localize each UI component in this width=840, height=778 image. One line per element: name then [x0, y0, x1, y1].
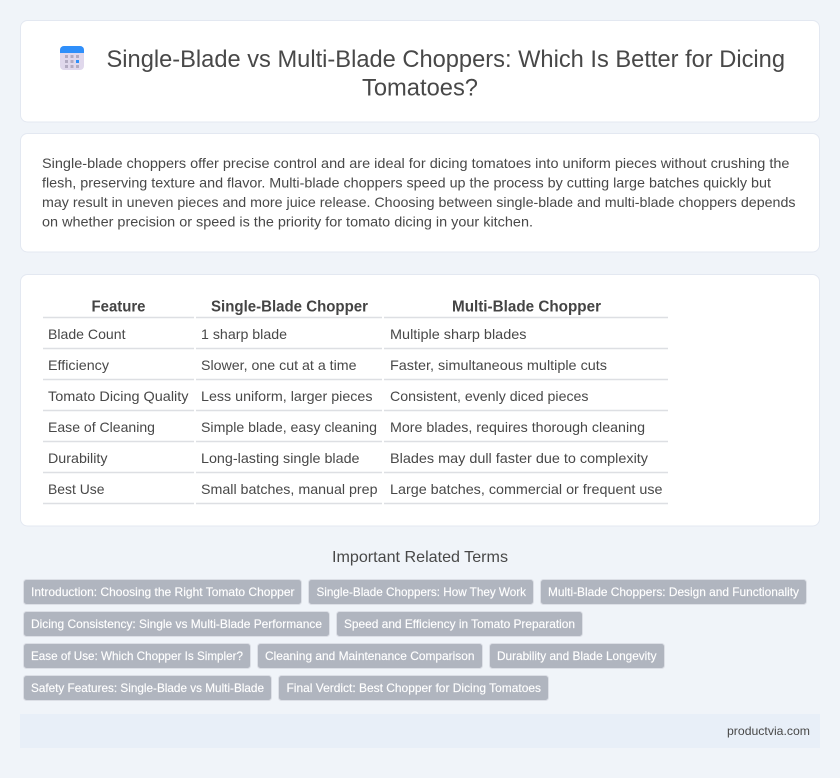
row: blade count: Blade Count — [48, 326, 126, 342]
chip: Speed and Efficiency in Tomato Preparation — [344, 617, 575, 631]
row: ease of cleaning: Simple blade, easy cleaning — [201, 419, 377, 435]
row: durability — [48, 450, 648, 466]
row: ease of cleaning: Ease of Cleaning — [48, 419, 155, 435]
row: efficiency: Efficiency — [48, 357, 109, 373]
table header: Feature — [92, 298, 146, 316]
panel: title card — [20, 20, 820, 122]
chip — [24, 580, 302, 604]
chip: Cleaning and Maintenance Comparison — [265, 649, 474, 663]
row: best use: Best Use — [48, 481, 105, 497]
table header: Multi-Blade Chopper — [452, 298, 601, 316]
row: efficiency: Faster, simultaneous multiple cuts — [390, 357, 607, 373]
footer — [20, 714, 820, 748]
chip: Safety Features: Single-Blade vs Multi-Blade — [31, 681, 264, 695]
table header — [92, 298, 601, 316]
row: durability: Blades may dull faster due to complexity — [390, 450, 648, 466]
panel: comparison table card — [20, 274, 820, 526]
row: best use — [48, 481, 663, 497]
footer: productvia.com — [727, 724, 810, 738]
row: tomato dicing quality: Tomato Dicing Quality — [48, 388, 188, 404]
chip — [24, 612, 330, 636]
text block: description: Single-blade choppers offer precise control and are ideal for dicing tomatoes into uniform pieces without crushing the — [42, 155, 790, 171]
comparison table — [43, 298, 668, 504]
chip — [336, 612, 582, 636]
row: tomato dicing quality — [48, 388, 588, 404]
chip — [24, 676, 272, 700]
row: ease of cleaning — [48, 419, 645, 435]
text block: description: on whether precision or speed is the priority for tomato dicing in your kitchen. — [42, 214, 533, 230]
chip: Single-Blade Choppers: How They Work — [316, 585, 527, 599]
panel: description card — [20, 134, 820, 252]
table header: Single-Blade Chopper — [211, 298, 368, 316]
chip: Introduction: Choosing the Right Tomato Chopper — [31, 585, 294, 599]
row: best use: Large batches, commercial or frequent use — [390, 481, 663, 497]
title: Tomatoes? — [362, 74, 478, 102]
row: tomato dicing quality: Consistent, evenly diced pieces — [390, 388, 588, 404]
chip: Durability and Blade Longevity — [497, 649, 656, 663]
chip: Multi-Blade Choppers: Design and Functionality — [548, 585, 799, 599]
chip: Ease of Use: Which Chopper Is Simpler? — [31, 649, 243, 663]
title: Single-Blade vs Multi-Blade Choppers: Which Is Better for Dicing — [106, 46, 785, 73]
row: blade count — [48, 326, 526, 342]
chip — [540, 580, 806, 604]
row: best use: Small batches, manual prep — [201, 481, 378, 497]
row: durability: Long-lasting single blade — [201, 450, 360, 466]
chip: Final Verdict: Best Chopper for Dicing Tomatoes — [286, 681, 541, 695]
row: ease of cleaning: More blades, requires thorough cleaning — [390, 419, 645, 435]
row: blade count: Multiple sharp blades — [390, 326, 526, 342]
text block: description: flesh, preserving texture and flavor. Multi-blade choppers speed up the process by cutting large batches quickly but — [42, 174, 771, 190]
text block: description — [42, 155, 796, 230]
row: tomato dicing quality: Less uniform, larger pieces — [201, 388, 372, 404]
chip: Dicing Consistency: Single vs Multi-Blade Performance — [31, 617, 322, 631]
chip — [258, 644, 482, 668]
chip — [24, 644, 250, 668]
chip — [278, 676, 548, 700]
text block: description: may result in uneven pieces and more juice release. Choosing between single-blade and multi-blade choppers depends — [42, 194, 796, 210]
title — [106, 46, 785, 102]
chip — [308, 580, 534, 604]
row: blade count: 1 sharp blade — [201, 326, 287, 342]
row: efficiency: Slower, one cut at a time — [201, 357, 357, 373]
row: efficiency — [48, 357, 607, 373]
heading: important related terms: Important Related Terms — [332, 549, 508, 566]
chip — [490, 644, 664, 668]
icon: calendar — [60, 46, 84, 70]
related terms chips — [24, 580, 806, 700]
row: durability: Durability — [48, 450, 108, 466]
